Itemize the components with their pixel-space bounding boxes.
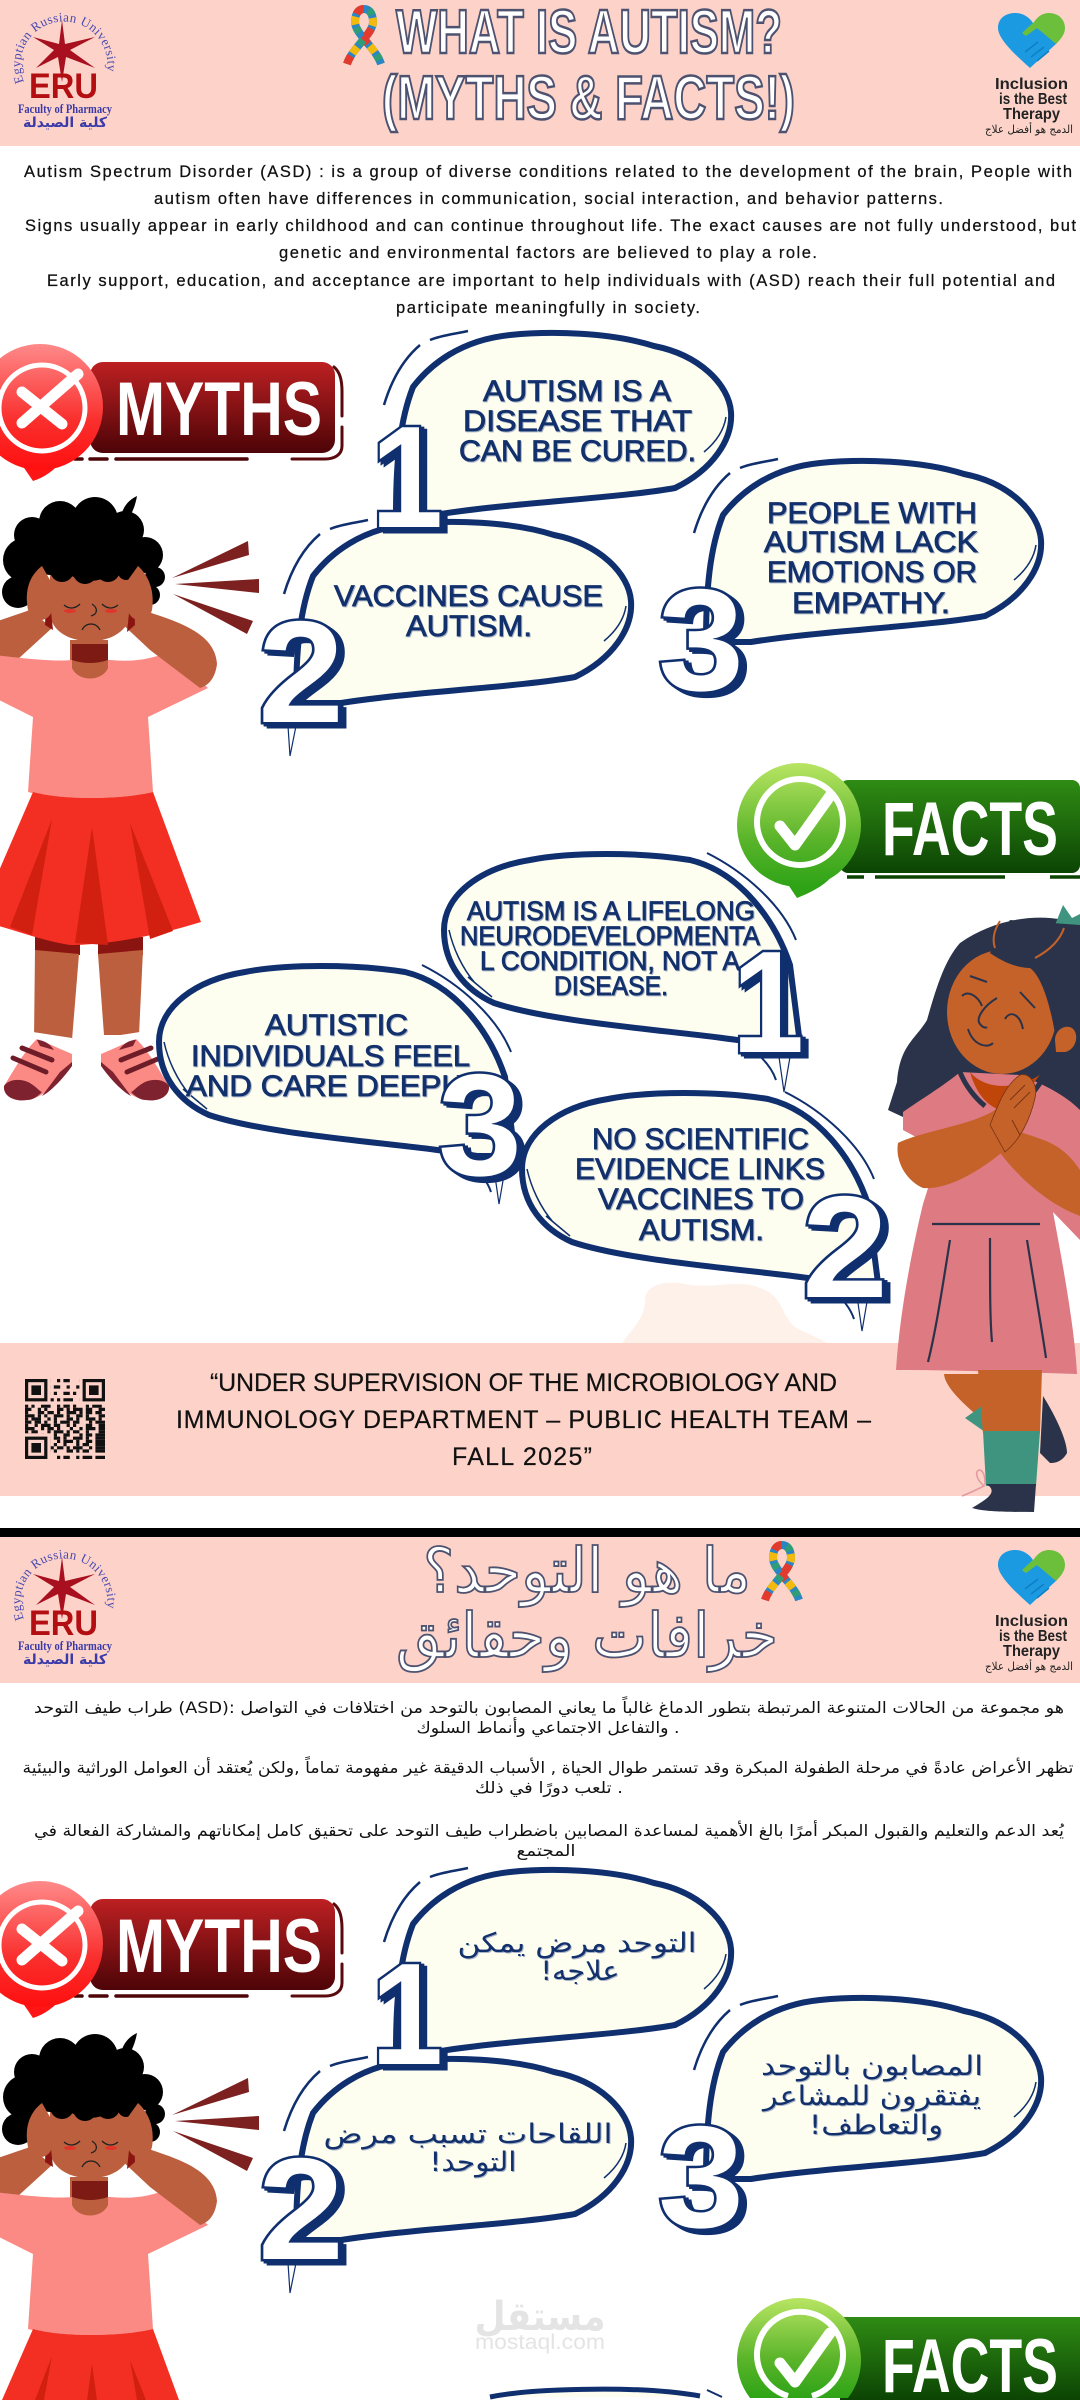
number 3: 3 (658, 559, 744, 721)
Arabic myth bubble 3: يفتقرون للمشاعر (761, 2081, 981, 2112)
fact bubble 1: DISEASE. (554, 971, 668, 1001)
fact bubble 2: AUTISM. (639, 1214, 764, 1247)
English page header band (0, 0, 1080, 146)
logo: Egyptian Russian University: Faculty of Pharmacy (18, 1638, 112, 1653)
number 2: 2 (802, 1166, 888, 1328)
fact bubble 1: AUTISM IS A LIFELONG (467, 896, 755, 926)
Arabic title: ما هو التوحد؟ (423, 1534, 751, 1607)
icon: autism ribbon (765, 1545, 799, 1600)
badge: myths (Arabic page): MYTHS (116, 1904, 322, 1989)
Arabic intro text block: هو مجموعة من الحالات المتنوعة المرتبطة بتطور الدماغ غالباً ما يعاني المصابون بالتوحد من اختلافات في التواصل :(ASD) طراب طيف التوحد (34, 1695, 1064, 1718)
divider bar between pages (0, 1528, 1080, 1537)
number 2: 2 (258, 591, 344, 753)
logo: Egyptian Russian University: كلية الصيدلة (23, 115, 108, 131)
myth bubble 3: EMOTIONS OR (767, 556, 977, 589)
badge: myths (Arabic page) (0, 1881, 342, 2018)
Arabic intro text block: . والتفاعل الاجتماعي وأنماط السلوك (416, 1717, 680, 1738)
myth bubble 1: CAN BE CURED. (459, 435, 696, 468)
logo: inclusion is the best therapy: الدمج هو أفضل علاج (985, 1659, 1073, 1673)
illustration: girl covering ears (Arabic page, cropped at skirt) (0, 2033, 259, 2400)
Arabic myth bubble 3: والتعاطف! (809, 2110, 943, 2141)
myth bubble 3: EMPATHY. (792, 587, 950, 620)
title: What is autism (382, 0, 795, 133)
top of fact bubble (Arabic page, cropped) (490, 2389, 722, 2397)
fact bubble 1: L CONDITION, NOT A (480, 946, 740, 976)
fact bubble 2: EVIDENCE LINKS (575, 1153, 825, 1186)
myth bubble 3 (694, 459, 1041, 642)
supervision note: IMMUNOLOGY DEPARTMENT – PUBLIC HEALTH TEAM – (176, 1406, 871, 1434)
logo: inclusion is the best therapy (985, 1550, 1073, 1673)
number 1: 1 (371, 396, 443, 558)
logo: inclusion is the best therapy: Therapy (1003, 1643, 1060, 1660)
logo: inclusion is the best therapy: Therapy (1003, 106, 1060, 123)
Arabic title: خرافات وحقائق (396, 1599, 778, 1672)
English intro text block: Signs usually appear in early childhood and can continue throughout life. The exact causes are not fully understood, but (25, 217, 1076, 235)
logo: Egyptian Russian University: Egyptian Russian University (14, 1550, 116, 1622)
number 1: 1 (732, 921, 804, 1083)
number 1: 1 (371, 1933, 443, 2095)
English intro text block (24, 163, 1076, 317)
Arabic myth bubble 3: المصابون بالتوحد (761, 2051, 983, 2082)
watermark: mostaql: mostaql.com (475, 2331, 605, 2354)
logo: inclusion is the best therapy: Inclusion (995, 76, 1068, 93)
watermark: mostaql: مستقل (474, 2294, 606, 2340)
logo: Egyptian Russian University (14, 1550, 116, 1668)
number 2: 2 (258, 2128, 344, 2290)
footer band (0, 1343, 1080, 1496)
number 3: 3 (658, 2096, 744, 2258)
logo: Egyptian Russian University: Egyptian Russian University (14, 12, 116, 84)
supervision note (176, 1369, 871, 1471)
fact bubble 3: INDIVIDUALS FEEL (191, 1040, 470, 1073)
Arabic intro text block: يُعد الدعم والتعليم والقبول المبكر أمرًا بالغ الأهمية لمساعدة المصابين باضطراب طيف التوحد على تحقيق كامل إمكاناتهم والمشاركة الفعالة في (34, 1820, 1065, 1841)
badge: myths: MYTHS (116, 367, 322, 452)
English intro text block: autism often have differences in communication, social interaction, and behavior patterns. (154, 190, 943, 208)
myth bubble 3: AUTISM LACK (764, 526, 978, 559)
myth bubble 2: VACCINES CAUSE (334, 580, 603, 613)
supervision note: FALL 2025” (452, 1443, 592, 1471)
badge: myths (0, 344, 342, 481)
Arabic title (396, 1534, 778, 1672)
Arabic myth bubble 1: علاجه! (540, 1956, 620, 1987)
badge: facts (737, 763, 1080, 898)
myth bubble 2: AUTISM. (406, 610, 532, 643)
Arabic intro text block: تظهر الأعراض عادةً في مرحلة الطفولة المبكرة وقد تستمر طوال الحياة , الأسباب الدقيقة غير مفهومة تماماً ,ولكن يُعتقد أن العوامل الوراثية والبيئية (22, 1755, 1074, 1778)
logo: inclusion is the best therapy: Inclusion (995, 1613, 1068, 1630)
fact bubble 2 (522, 1092, 878, 1331)
English intro text block: Autism Spectrum Disorder (ASD) : is a group of diverse conditions related to the development of the brain, People with (24, 163, 1072, 181)
title: What is autism: WHAT IS AUTISM? (396, 0, 782, 67)
English intro text block: participate meaningfully in society. (396, 299, 700, 317)
Arabic page header band (0, 1534, 1080, 1683)
logo: Egyptian Russian University: كلية الصيدلة (23, 1652, 108, 1668)
illustration: smiling girl (888, 905, 1080, 1512)
fact bubble 2: VACCINES TO (598, 1183, 804, 1216)
Arabic myth bubble 3 (694, 1996, 1041, 2179)
logo: Egyptian Russian University (14, 12, 116, 131)
logo: Egyptian Russian University: ERU (29, 67, 98, 106)
illustration: girl covering ears (0, 496, 259, 1100)
icon: autism ribbon (347, 9, 381, 64)
myth bubble 1: DISEASE THAT (463, 405, 692, 438)
fact bubble 1: NEURODEVELOPMENTA (460, 921, 760, 951)
myth bubble 1: AUTISM IS A (483, 375, 671, 408)
Arabic intro text block (22, 1695, 1074, 1861)
logo: inclusion is the best therapy: is the Best (999, 91, 1068, 108)
title: What is autism: (MYTHS & FACTS!) (382, 64, 795, 133)
Arabic myth bubble 2: التوحد! (430, 2147, 516, 2178)
myth bubble 2 (284, 520, 631, 756)
fact bubble 3: AND CARE DEEPLY. (186, 1070, 482, 1103)
fact bubble 3 (159, 965, 515, 1204)
Arabic myth bubble 1: التوحد مرض يمكن (458, 1928, 696, 1959)
Arabic myth bubble 2: اللقاحات تسبب مرض (324, 2119, 612, 2150)
logo: Egyptian Russian University: Faculty of Pharmacy (18, 101, 112, 116)
fact bubble 1 (444, 853, 800, 1092)
fact bubble 2: NO SCIENTIFIC (592, 1123, 809, 1156)
number 3: 3 (438, 1044, 522, 1206)
Arabic intro text block: المجتمع (516, 1841, 576, 1861)
fact bubble 3: AUTISTIC (265, 1009, 408, 1042)
English intro text block: Early support, education, and acceptance are important to help individuals with (ASD) reach their full potential and (47, 272, 1055, 290)
supervision note: “UNDER SUPERVISION OF THE MICROBIOLOGY AND (210, 1369, 837, 1397)
logo: inclusion is the best therapy: الدمج هو أفضل علاج (985, 122, 1073, 136)
Arabic myth bubble 2 (284, 2057, 631, 2293)
Arabic myth bubble 1 (384, 1868, 731, 2051)
Arabic intro text block: . تلعب دورًا في ذلك (475, 1778, 623, 1798)
English intro text block: genetic and environmental factors are believed to play a role. (279, 244, 817, 262)
logo: inclusion is the best therapy (985, 13, 1073, 136)
myth bubble 3: PEOPLE WITH (767, 497, 977, 530)
logo: Egyptian Russian University: ERU (29, 1604, 98, 1643)
logo: inclusion is the best therapy: is the Best (999, 1628, 1068, 1645)
myth bubble 1 (384, 331, 731, 514)
QR code (25, 1379, 105, 1459)
badge: facts (Arabic page, cropped) (737, 2298, 1080, 2400)
pale background blob (620, 1283, 833, 1346)
